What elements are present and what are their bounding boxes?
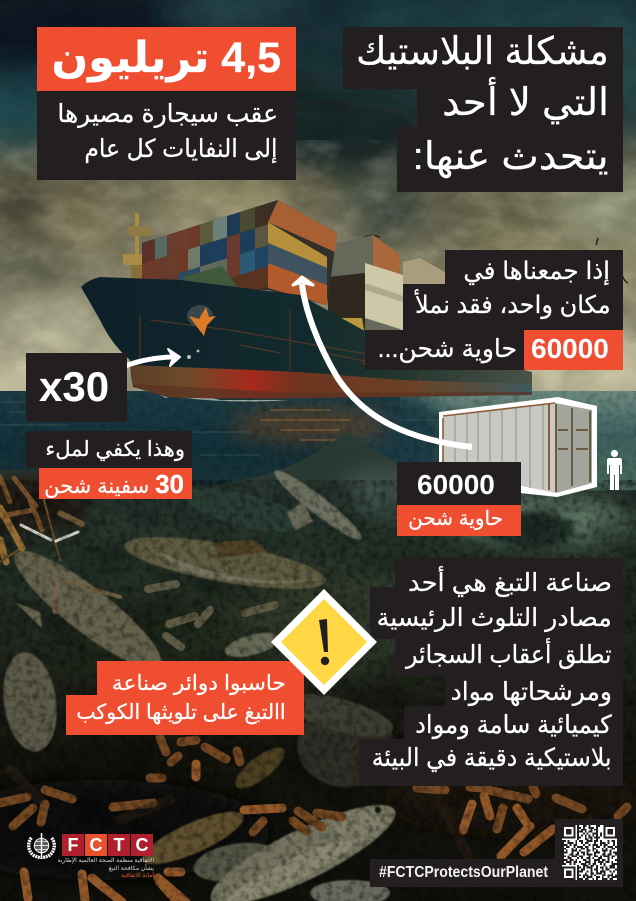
stat description [37, 91, 296, 180]
callout text [378, 258, 611, 364]
statement text: تطلق أعقاب السجائر [406, 640, 612, 668]
panel: enough to fill 30 ships [26, 431, 192, 499]
FCTC squares [62, 834, 153, 856]
underwater pollution area [0, 432, 636, 901]
statement text: مصادر التلوث الرئيسية [377, 604, 612, 632]
container caption: حاوية شحن [408, 508, 503, 530]
FCTC squares: T [114, 835, 124, 855]
FCTC squares: F [68, 835, 78, 855]
FCTC squares: C [90, 835, 102, 855]
wooden sticks and cigarettes near the surface [0, 477, 78, 562]
statement text [372, 566, 612, 772]
title text: التي لا أحد [442, 82, 609, 124]
logo caption: الاتفاقية منظمة الصحة العالمية الإطارية [57, 858, 154, 864]
sea surface [0, 388, 636, 511]
title block [343, 27, 623, 192]
call to action text [77, 672, 286, 724]
callout text: إذا جمعناها في [463, 258, 610, 285]
description [26, 431, 192, 468]
hull [81, 277, 532, 400]
logo caption: بشأن مكافحة التبغ [109, 866, 154, 872]
statement text: ومرشحاتها مواد [451, 678, 612, 706]
stat description: عقب سيجارة مصيرها [57, 100, 278, 128]
stat panel: 4.5 trillion butts [37, 27, 296, 180]
FCTC squares: C [136, 835, 148, 855]
callout text: مكان واحد، فقد نملأ [415, 292, 611, 319]
callout text: حاوية شحن... [378, 335, 517, 363]
call to action text: االتبغ على تلويثها الكوكب [77, 700, 286, 724]
hashtag [370, 859, 556, 887]
call to action: hold the tobacco industry accountable [66, 661, 304, 735]
mast [123, 213, 152, 280]
container ship [81, 200, 532, 400]
container caption [397, 505, 521, 536]
call to action text: حاسبوا دوائر صناعة [112, 672, 286, 694]
logo: WHO emblem and FCTC secretariat [27, 833, 154, 879]
sky with storm clouds [0, 0, 636, 400]
title text [356, 31, 609, 178]
panel: x30 multiplier: x30 [39, 363, 109, 410]
logo caption: أمانة الاتفاقية [121, 873, 154, 879]
statement text: كيميائية سامة ومواد [415, 710, 612, 738]
highlighted number [524, 330, 623, 370]
statement text: صناعة التبغ هي أحد [408, 568, 612, 596]
panel: QR code and hashtag [370, 819, 623, 887]
description: وهذا يكفي لملء [45, 438, 185, 461]
stat description: إلى النفايات كل عام [85, 135, 278, 163]
icon: WHO emblem [27, 833, 56, 859]
statement text: بلاستيكية دقيقة في البيئة [372, 744, 612, 772]
QR code [555, 819, 623, 887]
anchor emblem [187, 305, 216, 336]
stat headline [37, 27, 296, 91]
highlighted text: 30 سفينة شحن [44, 469, 184, 499]
birds [364, 236, 628, 296]
panel: x30 multiplier [26, 353, 127, 422]
callout: 60000 shipping containers [365, 250, 623, 370]
number: 60000 [417, 469, 495, 500]
logo caption [57, 858, 154, 879]
dead fish [0, 464, 406, 901]
murky texture over underwater scene [0, 480, 636, 901]
number [397, 462, 521, 505]
title text: مشكلة البلاستيك [356, 31, 609, 73]
highlighted number: 60000 [531, 333, 609, 364]
stat headline: 4,5 تريليون [51, 34, 281, 82]
far container stacks [328, 235, 445, 340]
cigarette butts [0, 513, 627, 901]
title text: يتحدث عنها: [413, 136, 609, 178]
panel: tobacco industry pollution statement [359, 558, 623, 786]
hashtag: #FCTCProtectsOurPlanet [379, 864, 548, 881]
main container stack [142, 200, 337, 326]
label: 60000 containers [397, 462, 521, 536]
